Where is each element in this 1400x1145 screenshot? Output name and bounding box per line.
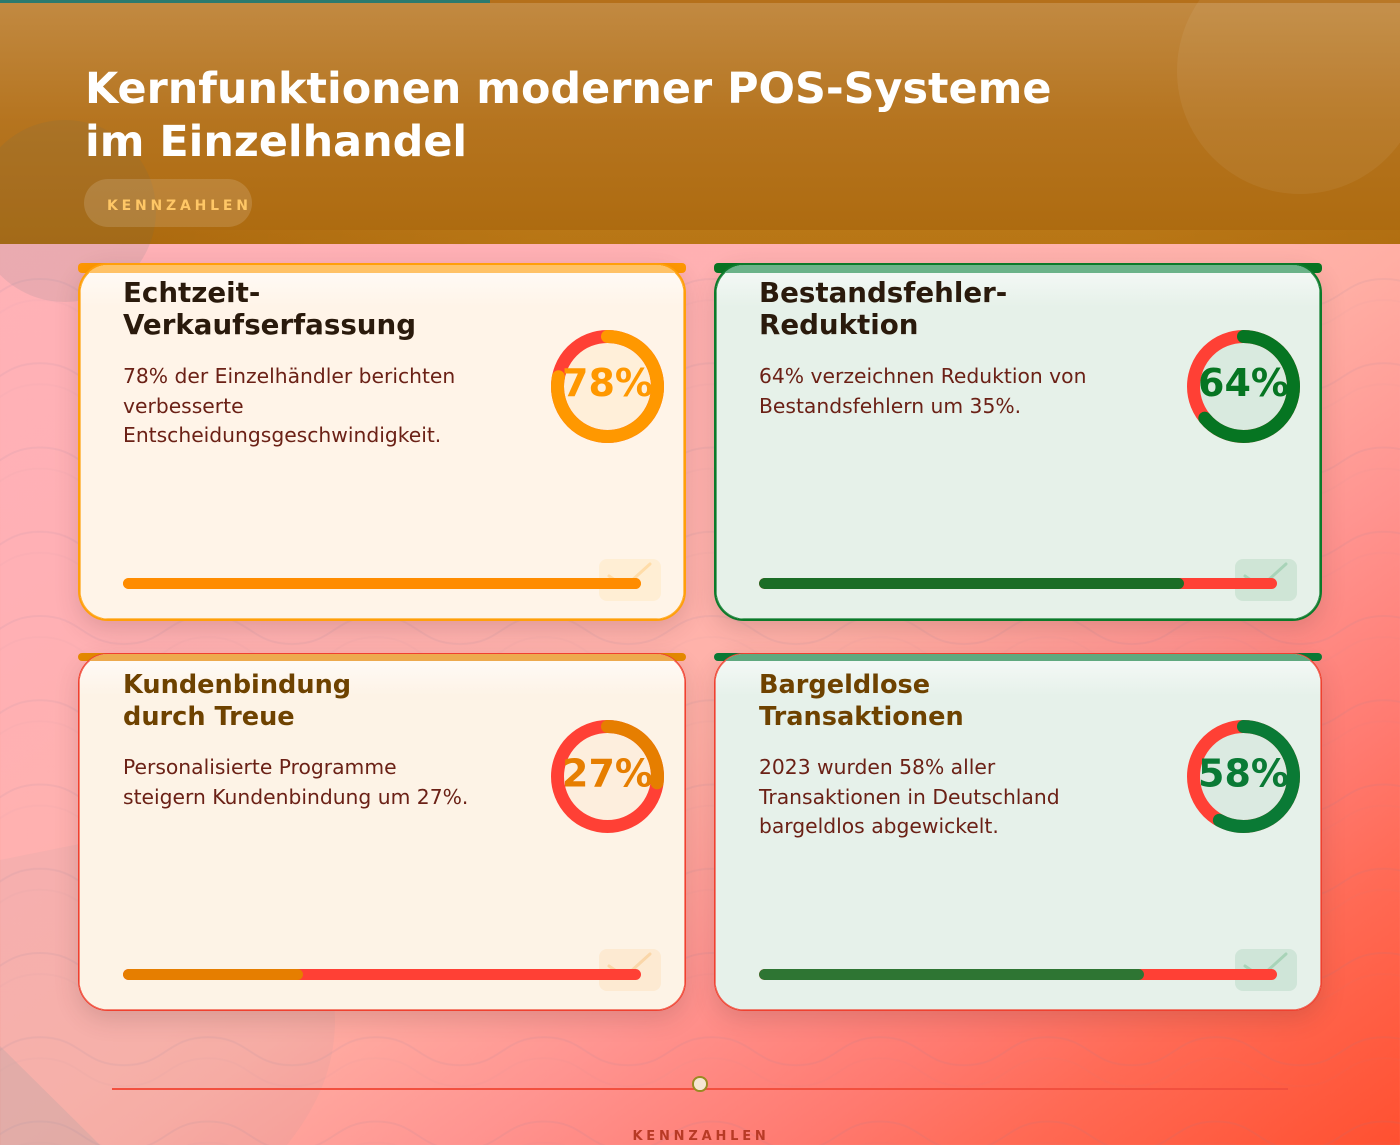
text block: Transaktionen in Deutschland — [759, 784, 1060, 808]
badge — [84, 179, 252, 227]
title — [85, 64, 1051, 167]
heading: durch Treue — [123, 702, 295, 732]
icon: check — [1235, 559, 1297, 601]
donut chart 78%: 78% — [562, 361, 653, 405]
progress bar — [123, 578, 641, 589]
badge: KENNZAHLEN — [107, 198, 252, 214]
card 2 solid top bar — [714, 263, 1322, 273]
card background with tinted strip — [80, 265, 684, 619]
header decorative circle left — [0, 120, 156, 302]
heading: Reduktion — [759, 308, 919, 341]
heading: Bargeldlose — [759, 670, 930, 700]
text block: Bestandsfehlern um 35%. — [759, 394, 1021, 418]
icon: check — [599, 559, 661, 601]
panel: Bargeldlose Transaktionen — [714, 653, 1322, 1011]
text block: steigern Kundenbindung um 27%. — [123, 784, 468, 808]
heading: Transaktionen — [759, 702, 964, 732]
progress bar — [759, 969, 1277, 980]
panel: Echtzeit-Verkaufserfassung — [78, 263, 686, 621]
heading: Verkaufserfassung — [123, 308, 416, 341]
title: Kernfunktionen moderner POS-Systeme — [85, 64, 1051, 114]
donut chart 58% — [1187, 720, 1300, 833]
text block: 78% der Einzelhändler berichten — [123, 364, 455, 388]
icon: check — [1235, 949, 1297, 991]
text block — [123, 755, 468, 808]
card 3 solid top bar — [78, 653, 686, 661]
progress bar — [759, 578, 1277, 589]
card background with tinted strip — [79, 654, 685, 1010]
donut chart 64%: 64% — [1198, 361, 1289, 405]
text block — [759, 364, 1086, 418]
heading — [759, 670, 964, 732]
footer divider line — [112, 1088, 1288, 1090]
donut chart 58%: 58% — [1198, 752, 1289, 796]
heading — [123, 670, 351, 732]
header bottom stripe — [0, 230, 1400, 244]
card background with tinted strip — [716, 265, 1320, 619]
text block: 64% verzeichnen Reduktion von — [759, 364, 1086, 388]
donut chart 27%: 27% — [562, 752, 653, 796]
text block — [758, 755, 1060, 838]
progress bar — [123, 969, 641, 980]
text block: 2023 wurden 58% aller — [759, 755, 995, 779]
text block: bargeldlos abgewickelt. — [759, 814, 999, 838]
icon: check — [599, 949, 661, 991]
donut chart 27% — [551, 720, 664, 833]
header top accent stripe — [0, 0, 1400, 3]
card background with tinted strip — [715, 654, 1321, 1010]
heading — [123, 276, 416, 341]
heading — [759, 276, 1007, 341]
donut chart 78% — [551, 330, 664, 443]
panel: Bestandsfehler-Reduktion — [714, 263, 1322, 621]
heading: Bestandsfehler- — [759, 276, 1007, 309]
title: im Einzelhandel — [85, 117, 467, 167]
text block: Entscheidungsgeschwindigkeit. — [123, 423, 441, 447]
header band — [0, 0, 1400, 244]
footer label: KENNZAHLEN — [632, 1129, 770, 1144]
panel: Kundenbindung durch Treue — [78, 653, 686, 1011]
card 4 solid top bar — [714, 653, 1322, 661]
text block: Personalisierte Programme — [123, 755, 397, 779]
text block: verbesserte — [123, 394, 244, 418]
header decorative circle — [1177, 0, 1400, 194]
footer divider dot — [692, 1076, 708, 1092]
heading: Echtzeit- — [123, 276, 260, 309]
heading: Kundenbindung — [123, 670, 351, 700]
card 1 solid top bar — [78, 263, 686, 273]
text block — [123, 364, 455, 447]
donut chart 64% — [1187, 330, 1300, 443]
